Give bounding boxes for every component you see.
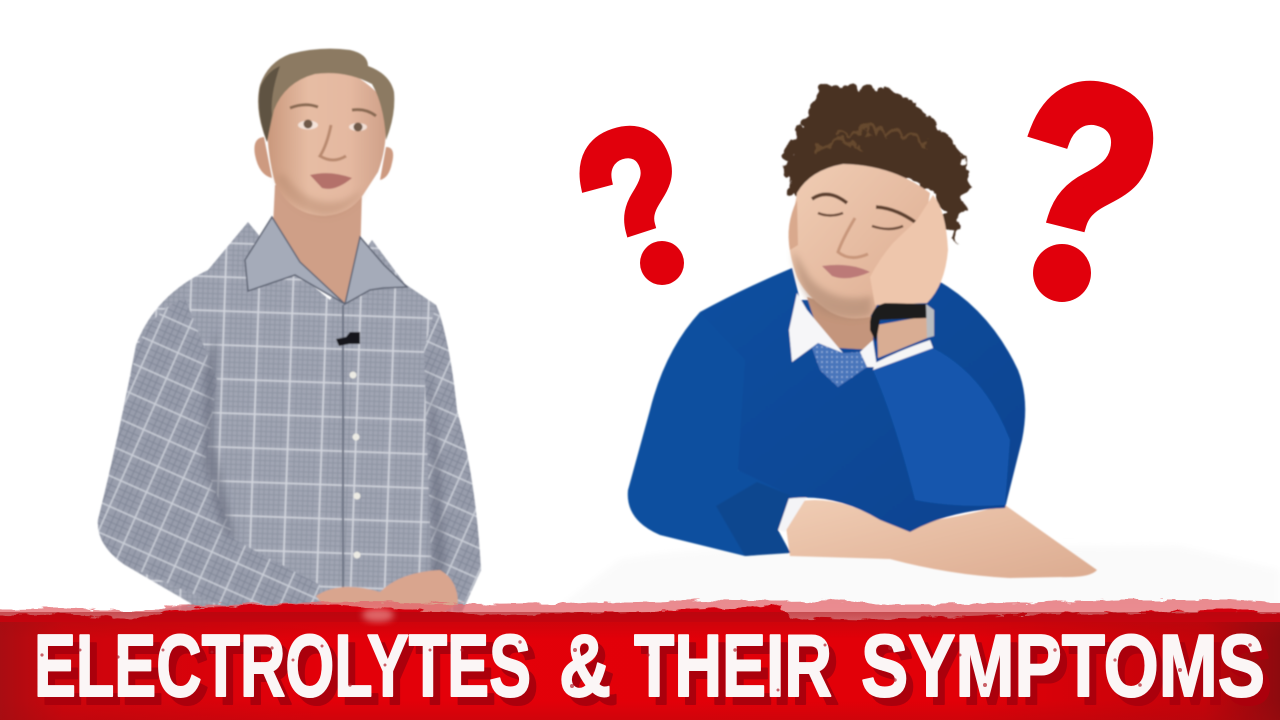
icon: small question mark: ?: [553, 80, 719, 323]
presenter mouth: [310, 173, 352, 189]
hand on cheek: [870, 195, 948, 305]
sweater cuff: [716, 482, 790, 556]
presenter shirt: [98, 222, 481, 612]
presenter microphone: [336, 332, 360, 346]
stubble: [793, 250, 872, 318]
banner red band: [0, 604, 1280, 720]
figure: tired man on the right: [628, 80, 1097, 578]
neck: [807, 297, 873, 350]
presenter hands: [316, 570, 458, 614]
presenter neck: [273, 185, 362, 303]
presenter hair: [258, 49, 394, 142]
wrist: [877, 316, 927, 358]
forearm and hand on table: [783, 500, 1097, 578]
presenter darker side hair: [259, 66, 280, 142]
presenter left sleeve: [98, 298, 320, 612]
sweater raised arm: [873, 348, 1010, 506]
eyebrows and closed eyes: [812, 194, 915, 229]
banner horizontal colouring: [0, 622, 1280, 720]
banner title text: ELECTROLYTES: [34, 616, 531, 715]
presenter collar: [245, 217, 407, 304]
watch case: [926, 304, 934, 338]
presenter jaw shadow: [275, 175, 363, 216]
mouth: [822, 265, 870, 278]
presenter face: [267, 66, 386, 216]
ear: [789, 200, 798, 250]
banner faded top edge: [0, 600, 1280, 640]
banner title text: &: [559, 616, 611, 715]
hand showing through banner: [362, 608, 394, 622]
presenter eyebrows and eyes: [290, 105, 376, 132]
watch: [870, 303, 927, 342]
nose: [838, 218, 868, 258]
sweater left arm: [628, 312, 790, 556]
hair: [780, 80, 963, 236]
sweater body: [700, 268, 1025, 532]
banner title text: THEIR: [634, 616, 832, 715]
title banner: [0, 600, 1280, 720]
presenter right sleeve: [424, 305, 481, 608]
icon: large question mark: [1027, 80, 1154, 302]
title speckle texture: [40, 640, 1252, 692]
presenter sleeve fold shading: [203, 330, 446, 575]
icon: large question mark: ?: [977, 16, 1186, 353]
presenter placket: [342, 305, 344, 605]
presenter ears: [254, 137, 393, 180]
presenter nose: [320, 125, 346, 160]
table surface: [560, 546, 1280, 606]
face: [789, 164, 930, 318]
tie: [812, 343, 867, 387]
icon: small question mark: [580, 126, 684, 285]
presenter buttons: [350, 372, 360, 558]
banner title text: [34, 616, 1265, 715]
white shirt cuff: [778, 492, 810, 532]
white shirt cuff at wrist: [873, 340, 933, 370]
collar: [789, 293, 877, 367]
figure: presenter on the left: [98, 49, 481, 614]
banner shading: [0, 612, 1280, 720]
